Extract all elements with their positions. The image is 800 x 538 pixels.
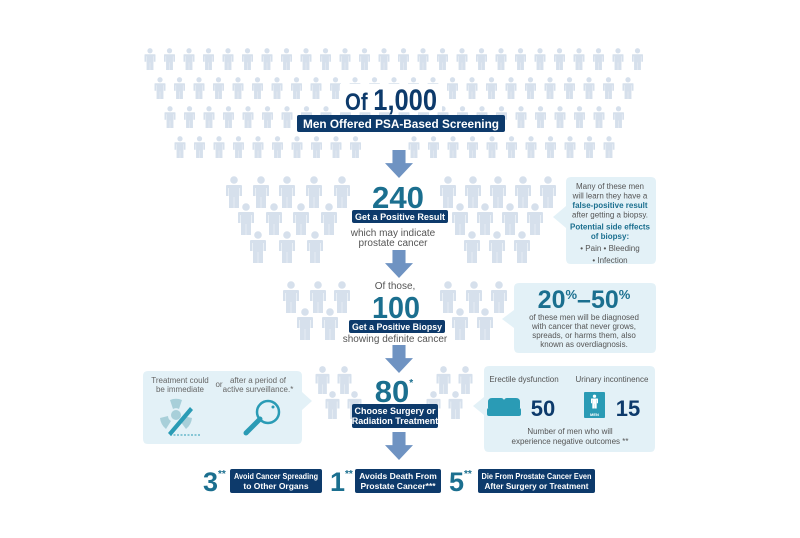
callout: overdiagnosis: spreads, or harms them, also <box>532 331 636 340</box>
callout: false-positive: • Pain • Bleeding <box>580 244 640 253</box>
outcome: 5 die from prostate cancer: ** <box>464 469 472 480</box>
number: 240: 240 <box>372 180 424 215</box>
outcome: 3 avoid spreading: 3 <box>203 467 218 497</box>
callout: overdiagnosis: known as overdiagnosis. <box>540 340 628 349</box>
callout: treatment options: or <box>215 380 223 389</box>
text: Of those,: Of those, <box>375 281 415 292</box>
callout: negative outcomes: experience negative outcomes ** <box>512 437 628 446</box>
outcome: 3 avoid spreading: ** <box>218 469 226 480</box>
callout: treatment options: after a period of <box>230 376 286 385</box>
callout: treatment options <box>143 371 312 444</box>
callout: negative outcomes: Urinary incontinence <box>576 375 649 384</box>
figures: tier 100 <box>283 281 507 340</box>
number: 80*: * <box>409 378 413 389</box>
callout: treatment options: active surveillance.* <box>223 385 293 394</box>
label: Choose Surgery or Radiation Treatment: Choose Surgery or <box>354 406 436 416</box>
label: Get a Positive Biopsy: Get a Positive Biopsy <box>352 322 443 333</box>
callout: false-positive: Potential side effects <box>570 222 651 232</box>
callout: treatment options: Treatment could <box>151 376 209 385</box>
outcome: 5 die from prostate cancer: After Surgery or Treatment <box>484 481 589 491</box>
label: Men Offered PSA-Based Screening: Men Offered PSA-Based Screening <box>303 117 499 131</box>
icon: magnifying glass <box>246 401 279 433</box>
callout: false-positive <box>553 177 656 265</box>
label: Get a Positive Result: Get a Positive Result <box>355 212 446 223</box>
callout: negative outcomes <box>473 366 655 452</box>
text: which may indicate prostate cancer: which may indicate <box>351 228 435 239</box>
icon: radiation and scalpel <box>160 399 200 436</box>
callout: overdiagnosis: % <box>619 287 631 302</box>
icon: bed <box>487 398 521 416</box>
arrow 4 <box>385 432 413 460</box>
callout: false-positive: Many of these men <box>576 182 644 191</box>
number: 100: 100 <box>372 290 420 325</box>
arrow 2 <box>385 250 413 278</box>
icon: men restroom sign <box>584 392 605 418</box>
callout: false-positive: will learn they have a <box>572 192 648 200</box>
icon: men restroom sign: MEN <box>590 412 599 417</box>
arrow 1 <box>385 150 413 178</box>
callout: negative outcomes: 15 <box>616 396 640 421</box>
label: Choose Surgery or Radiation Treatment: Radiation Treatment <box>352 416 438 426</box>
callout: overdiagnosis: –50 <box>577 286 619 314</box>
outcome: 1 avoids death: Prostate Cancer*** <box>360 481 436 491</box>
callout: treatment options: be immediate <box>156 385 205 394</box>
outcome: 5 die from prostate cancer: 5 <box>449 467 464 497</box>
callout: overdiagnosis: with cancer that never grows, <box>531 322 636 331</box>
title: Of 1,000: Of 1,000 <box>345 84 437 117</box>
arrow 3 <box>385 345 413 373</box>
outcome: 3 avoid spreading <box>203 467 322 497</box>
callout: negative outcomes: 50 <box>531 396 555 421</box>
outcome: 3 avoid spreading: Avoid Cancer Spreading <box>234 471 318 481</box>
callout: overdiagnosis: % <box>565 287 577 302</box>
callout: false-positive: of biopsy: <box>591 232 629 241</box>
callout: overdiagnosis: of these men will be diagnosed <box>529 313 639 322</box>
outcome: 1 avoids death: 1 <box>330 467 345 497</box>
outcome: 1 avoids death <box>330 467 441 497</box>
outcome: 1 avoids death: Avoids Death From <box>359 471 437 481</box>
number: 80*: 80 <box>375 374 409 409</box>
callout: false-positive: false-positive result <box>572 201 648 210</box>
figures: 1000 men grid <box>142 48 649 158</box>
figures: tier 80 <box>316 366 472 419</box>
outcome: 5 die from prostate cancer: Die From Prostate Cancer Even <box>482 471 592 481</box>
callout: overdiagnosis <box>502 283 656 353</box>
callout: negative outcomes: Erectile dysfunction <box>489 375 559 384</box>
text: which may indicate prostate cancer: prostate cancer <box>359 238 428 249</box>
outcome: 1 avoids death: ** <box>345 469 353 480</box>
figures: tier 240 <box>226 176 556 263</box>
outcome: 3 avoid spreading: to Other Organs <box>243 481 309 491</box>
callout: overdiagnosis: 20 <box>538 286 565 314</box>
callout: false-positive: • Infection <box>592 256 628 265</box>
text: showing definite cancer: showing definite cancer <box>343 334 448 345</box>
callout: false-positive: after getting a biopsy. <box>572 210 648 220</box>
label: Choose Surgery or Radiation Treatment <box>352 404 438 428</box>
callout: negative outcomes: Number of men who will <box>527 427 613 436</box>
outcome: 5 die from prostate cancer <box>449 467 595 497</box>
